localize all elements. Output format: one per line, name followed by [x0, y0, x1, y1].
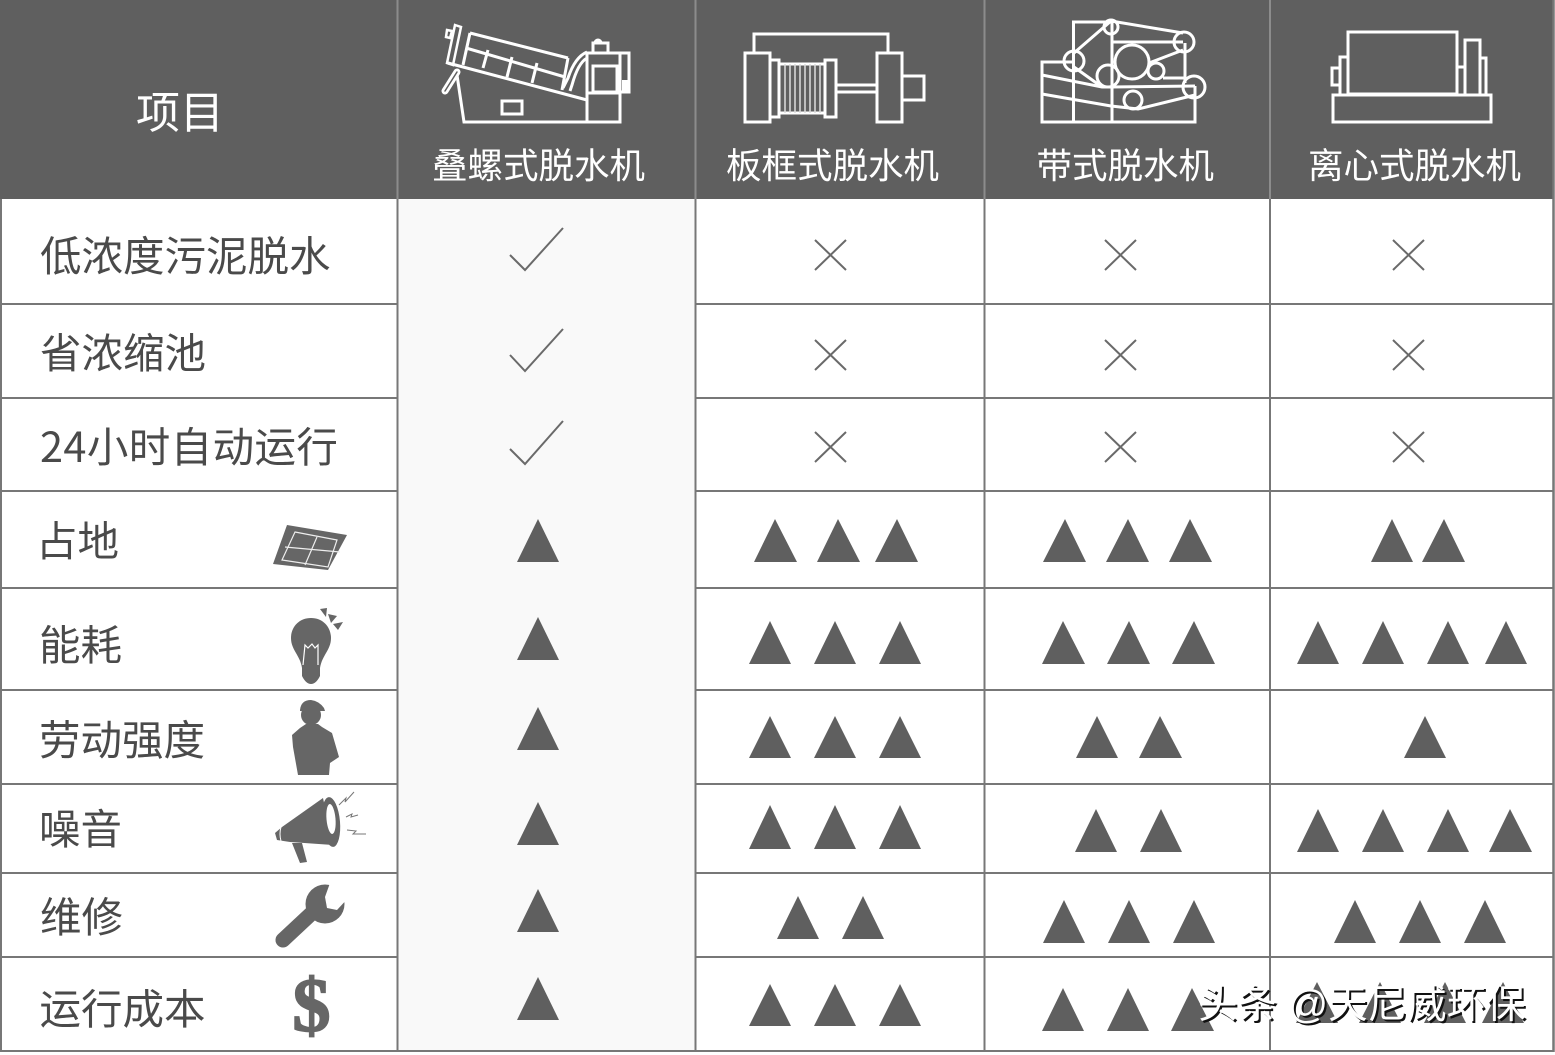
icon: plate frame press machine	[745, 34, 924, 122]
row label: 运行成本: 运行成本	[40, 976, 206, 1036]
row label: 劳动强度: 劳动强度	[39, 707, 205, 767]
triangles: 能耗 row	[517, 617, 1527, 664]
icon: dollar sign: $	[292, 964, 330, 1048]
row label: 维修: 维修	[40, 884, 123, 944]
row label: 占地: 占地	[36, 508, 119, 568]
check marks: 叠螺式 column	[510, 228, 563, 464]
icon: belt press machine	[1042, 20, 1205, 122]
label: 带式脱水机: 带式脱水机	[1036, 138, 1214, 189]
row label: 低浓度污泥脱水: 低浓度污泥脱水	[40, 223, 331, 283]
right table border	[1552, 0, 1555, 1052]
icon: screw press machine	[445, 25, 629, 122]
triangles: 占地 row	[517, 519, 1465, 562]
row label: 24小时自动运行: 24小时自动运行	[40, 414, 338, 474]
label: 板框式脱水机: 板框式脱水机	[726, 138, 939, 189]
label: 叠螺式脱水机: 叠螺式脱水机	[432, 138, 645, 189]
watermark: 头条 @天尼威环保	[1200, 985, 1528, 1029]
watermark: 头条 @天尼威环保	[1198, 983, 1526, 1027]
icon: centrifuge machine	[1332, 32, 1491, 122]
header band	[0, 0, 1553, 199]
row label: 能耗: 能耗	[39, 612, 122, 672]
icon: floor area panel	[273, 525, 347, 570]
cross marks: other machines	[815, 240, 1424, 462]
icon: worker	[292, 700, 339, 775]
triangles: 噪音 row	[517, 802, 1532, 852]
triangles: 劳动强度 row	[517, 707, 1446, 758]
triangles: 维修 row	[517, 889, 1506, 943]
icon: megaphone	[275, 792, 366, 863]
row label: 省浓缩池: 省浓缩池	[40, 320, 206, 380]
heading: 项目: 项目	[136, 77, 224, 141]
label: 离心式脱水机: 离心式脱水机	[1308, 138, 1521, 189]
row label: 噪音: 噪音	[39, 796, 122, 856]
icon: wrench	[283, 880, 350, 940]
icon: light bulb	[291, 608, 343, 684]
triangles: 运行成本 row	[517, 977, 1524, 1031]
